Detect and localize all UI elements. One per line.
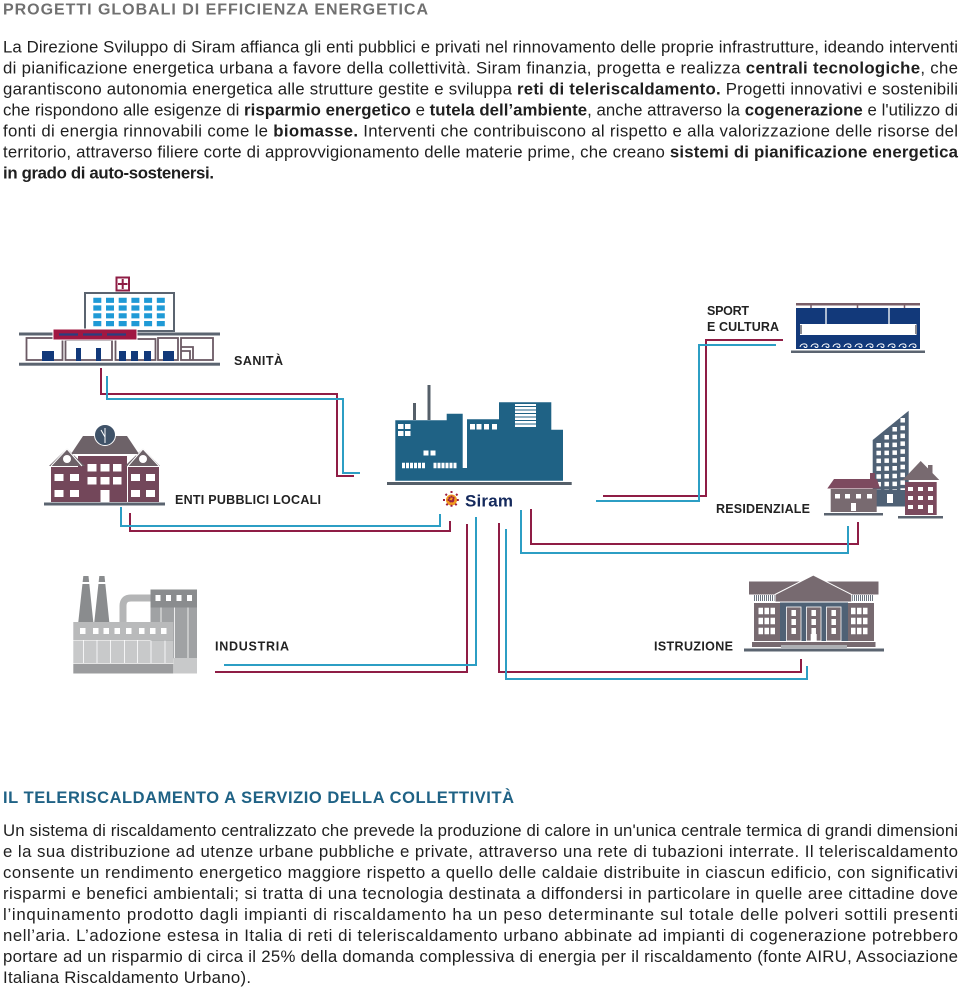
label: sport e cultura: SPORT <box>707 304 749 318</box>
connector: sport e cultura <box>596 340 783 501</box>
icon: residential buildings <box>824 411 943 518</box>
title: progetti globali: PROGETTI GLOBALI DI EFFICIENZA ENERGETICA <box>3 2 428 18</box>
text block: teleriscaldamento description: consente un rendimento energetico maggiore rispetto a quello delle caldaie distribuite in ciascun edificio, con significativi <box>3 863 958 882</box>
label: istruzione: ISTRUZIONE <box>654 640 733 654</box>
text block: teleriscaldamento description: portare ad un risparmio di circa il 25% della domanda complessiva di energia per il riscaldamento (fonte AIRU, Associazione <box>3 947 958 966</box>
text block: introduction: fonti di energia rinnovabili come le biomasse. Interventi che contribuiscono al rispetto e alla valorizzazione delle risorse del <box>3 122 958 140</box>
connector: residenziale <box>521 509 858 553</box>
text block: teleriscaldamento description: l’inquinamento prodotto dagli impianti di riscaldamento ha un peso determinante sul totale delle polveri sottili presenti <box>3 905 958 924</box>
connector: istruzione <box>499 523 807 679</box>
text block: introduction: di pianificazione energetica urbana a favore della collettività. Siram finanzia, progetta e realizza centrali tecnologiche, che <box>3 58 958 78</box>
icon: school building <box>744 575 884 652</box>
text block: teleriscaldamento description: Italiana Riscaldamento Urbano). <box>3 968 251 987</box>
icon: public building with clock <box>44 424 165 506</box>
connector: enti pubblici locali <box>121 507 450 531</box>
text block: introduction: territorio, attraverso filiere corte di approvvigionamento delle materie prime, che creano sistemi di pianificazione energetica <box>3 142 959 162</box>
connector: industria <box>215 517 476 672</box>
label: sanità: SANITÀ <box>234 353 283 368</box>
label: sport e cultura: E CULTURA <box>707 320 779 334</box>
icon: hospital <box>19 278 220 366</box>
label: sport e cultura <box>707 304 779 334</box>
icon: industrial plant <box>73 576 197 674</box>
text block: teleriscaldamento description <box>3 821 958 987</box>
text block: teleriscaldamento description: Un sistema di riscaldamento centralizzato che prevede la produzione di calore in un'unica centrale termica di grandi dimensioni <box>3 821 958 840</box>
icon: siram power plant <box>387 385 572 485</box>
text block: teleriscaldamento description: nell’aria. L’adozione estesa in Italia di reti di teleriscaldamento urbano abbinate ad impianti di cogenerazione potrebbero <box>3 926 958 945</box>
text block: introduction <box>3 38 959 182</box>
text block: introduction: che rispondono alle esigenze di risparmio energetico e tutela dell’ambiente, anche attraverso la cogenerazione e l'utilizzo di <box>3 100 958 120</box>
label: enti pubblici locali: ENTI PUBBLICI LOCALI <box>175 493 321 507</box>
text block: teleriscaldamento description: e la sua distribuzione ad utenze urbane pubbliche e private, attraverso una rete di tubazioni interrate. Il teleriscaldamento <box>3 842 958 861</box>
logo: siram: Siram <box>465 492 513 510</box>
icon: sport and culture building <box>791 303 925 353</box>
label: industria: INDUSTRIA <box>215 640 289 654</box>
text block: introduction: La Direzione Sviluppo di Siram affianca gli enti pubblici e privati nel rinnovamento delle proprie infrastrutture, ideando interventi <box>3 38 958 56</box>
heading: il teleriscaldamento: IL TELERISCALDAMENTO A SERVIZIO DELLA COLLETTIVITÀ <box>3 788 514 807</box>
label: residenziale: RESIDENZIALE <box>716 502 810 516</box>
logo: siram <box>443 491 513 510</box>
text block: introduction: in grado di auto-sostenersi. <box>3 164 214 182</box>
connector: sanità <box>101 368 360 476</box>
text block: introduction: garantiscono autonomia energetica alle strutture gestite e sviluppa reti di teleriscaldamento. Progetti innovativi e sostenibili <box>3 80 958 98</box>
text block: teleriscaldamento description: risparmi e benefici ambientali; si tratta di una tecnologia destinata a diffondersi in particolare in quelle aree cittadine dove <box>3 884 958 903</box>
